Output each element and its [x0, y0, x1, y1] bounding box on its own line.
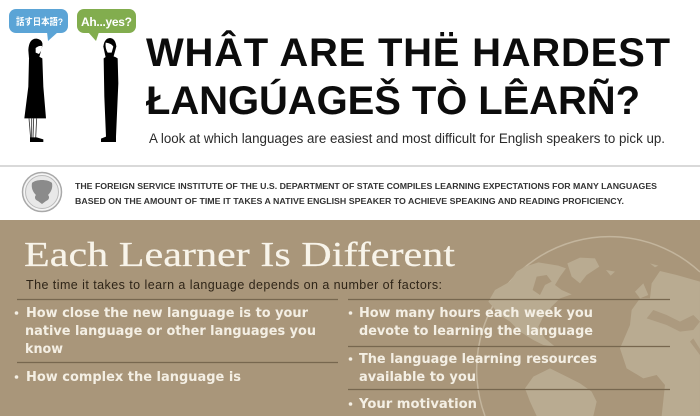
left factor list: How complex the language is [26, 370, 241, 385]
intro text: The time it takes to learn a language depends on a number of factors: [26, 278, 442, 292]
panel: each learner is different [0, 220, 700, 416]
left factor list: How close the new language is to your [26, 306, 309, 321]
title: WHÂT ARE THË HARDEST [146, 29, 670, 75]
speech bubble: green Ah yes [77, 9, 136, 41]
speech bubble: green Ah yes: Ah...yes? [81, 15, 132, 29]
left factor list: native language or other languages you [25, 324, 316, 339]
right factor list: available to you [359, 370, 476, 385]
speech bubble: blue Japanese [9, 9, 68, 41]
right factor list [348, 300, 670, 412]
left factor list [15, 300, 338, 385]
title [146, 29, 670, 123]
right factor list: The language learning resources [359, 352, 597, 367]
right factor list: devote to learning the language [359, 324, 593, 339]
right factor list: How many hours each week you [359, 306, 593, 321]
icon: man figure [101, 38, 118, 142]
right factor list: Your motivation [358, 397, 477, 412]
heading: Each Learner Is Different [24, 235, 455, 274]
text block: Foreign Service Institute note [75, 182, 657, 206]
text block: Foreign Service Institute note: BASED ON THE AMOUNT OF TIME IT TAKES A NATIVE ENGLISH SPEAKER TO ACHIEVE SPEAKING AND READING PROFICIENCY. [75, 197, 624, 206]
title: ŁANGÚAGEŠ TÒ LÊARÑ? [146, 77, 640, 123]
icon: woman figure [24, 39, 46, 142]
text block: Foreign Service Institute note: THE FOREIGN SERVICE INSTITUTE OF THE U.S. DEPARTMENT OF STATE COMPILES LEARNING EXPECTATIONS FOR MANY LANGUAGES [75, 182, 657, 191]
left factor list: know [25, 342, 63, 357]
icon: globe [477, 237, 700, 416]
subtitle: A look at which languages are easiest and most difficult for English speakers to pick up. [149, 131, 665, 146]
divider rule [0, 165, 700, 167]
speech bubble: blue Japanese: 話す日本語? [16, 16, 63, 28]
icon: U.S. Department of State seal [22, 172, 62, 212]
header panel [0, 0, 700, 220]
